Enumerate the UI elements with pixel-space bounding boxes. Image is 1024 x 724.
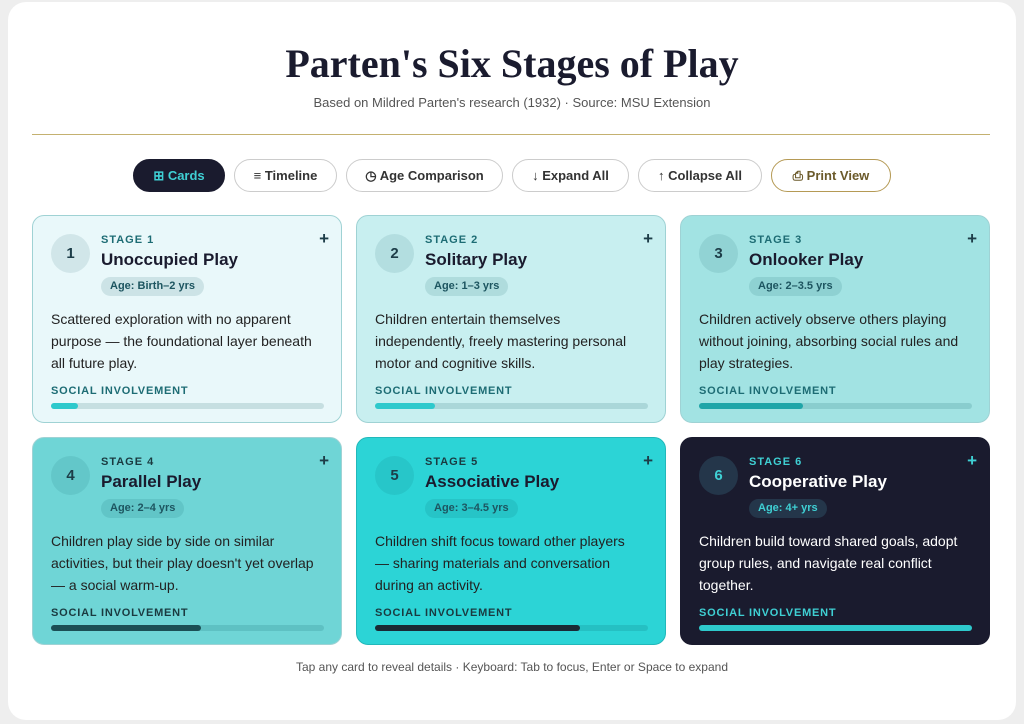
card: stage 4: SOCIAL INVOLVEMENT [51,607,188,619]
card: stage 5: + [643,451,653,470]
card: stage 1: 1 [66,245,75,262]
card: stage 5 [356,437,666,645]
button: cards: ⊞ Cards [153,168,205,182]
button: collapse [638,159,762,192]
button: age comparison: ◷ Age Comparison [365,168,484,182]
card: stage 1: Age: Birth–2 yrs [110,280,195,292]
card: stage 1 [32,215,342,423]
card: stage 2: + [643,229,653,248]
card: stage 6: 6 [714,467,723,484]
card: stage 6: Cooperative Play [749,472,887,491]
card: stage 5: SOCIAL INVOLVEMENT [375,607,512,619]
button: cards [133,159,225,192]
card: stage 1: Unoccupied Play [101,250,238,269]
card: stage 1: + [319,229,329,248]
card: stage 4: 4 [66,467,75,484]
card: stage 2: SOCIAL INVOLVEMENT [375,385,512,397]
card: stage 6: + [967,451,977,470]
card: stage 4: Age: 2–4 yrs [110,502,175,514]
title: Parten's Six Stages of Play [285,41,739,86]
card: stage 4: STAGE 4 [101,456,154,468]
button: timeline: ≡ Timeline [254,168,317,183]
card: stage 3: SOCIAL INVOLVEMENT [699,385,836,397]
button: expand: ↓ Expand All [532,168,609,183]
card: stage 4: Parallel Play [101,472,201,491]
card: stage 6 [680,437,990,645]
card: stage 1: STAGE 1 [101,234,154,246]
button: timeline [234,159,337,192]
card: stage 5: Children shift focus toward other players [375,533,625,549]
card: stage 3: STAGE 3 [749,234,802,246]
button: print: ⎙ Print View [793,168,869,182]
button: collapse: ↑ Collapse All [658,168,742,183]
card: stage 3: Age: 2–3.5 yrs [758,280,833,292]
button: age comparison [346,159,503,192]
card: stage 2: Children entertain themselves independently, freely mastering personal motor and cognitive skills. [375,311,626,371]
card: stage 3: Onlooker Play [749,250,863,269]
card: stage 3: + [967,229,977,248]
card: stage 5: Age: 3–4.5 yrs [434,502,509,514]
card: stage 6: SOCIAL INVOLVEMENT [699,607,836,619]
card: stage 4 [32,437,342,645]
card: stage 2: STAGE 2 [425,234,478,246]
card: stage 4: + [319,451,329,470]
card: stage 5: — sharing materials and conversation [375,555,610,571]
card: stage 2: Solitary Play [425,250,527,269]
card: stage 2: Age: 1–3 yrs [434,280,499,292]
card: stage 2: 2 [390,245,399,262]
toolbar buttons [133,159,891,192]
card: stage 1: Scattered exploration with no apparent purpose — the foundational layer beneath all future play. [51,311,312,371]
card: stage 3: Children actively observe others playing without joining, absorbing social rules and play strategies. [699,311,958,371]
card: stage 5: STAGE 5 [425,456,478,468]
card: stage 6: Age: 4+ yrs [758,502,818,514]
card: stage 2 [356,215,666,423]
card: stage 5: during an activity. [375,577,483,593]
subtitle: Based on Mildred Parten's research (1932) · Source: MSU Extension [313,95,710,110]
card: stage 3: 3 [714,245,723,262]
card: stage 1: SOCIAL INVOLVEMENT [51,385,188,397]
card: stage 6: Children build toward shared goals, adopt group rules, and navigate real conflict together. [699,533,957,593]
card: stage 6: STAGE 6 [749,456,802,468]
card: stage 5: Associative Play [425,472,559,491]
footer note: Tap any card to reveal details · Keyboard: Tab to focus, Enter or Space to expand [296,660,728,674]
card: stage 3 [680,215,990,423]
button: print [771,159,891,192]
button: expand [512,159,629,192]
card: stage 4: Children play side by side on similar activities, but their play doesn't yet overlap — a social warm-up. [51,533,314,593]
card: stage 5: 5 [390,467,399,484]
